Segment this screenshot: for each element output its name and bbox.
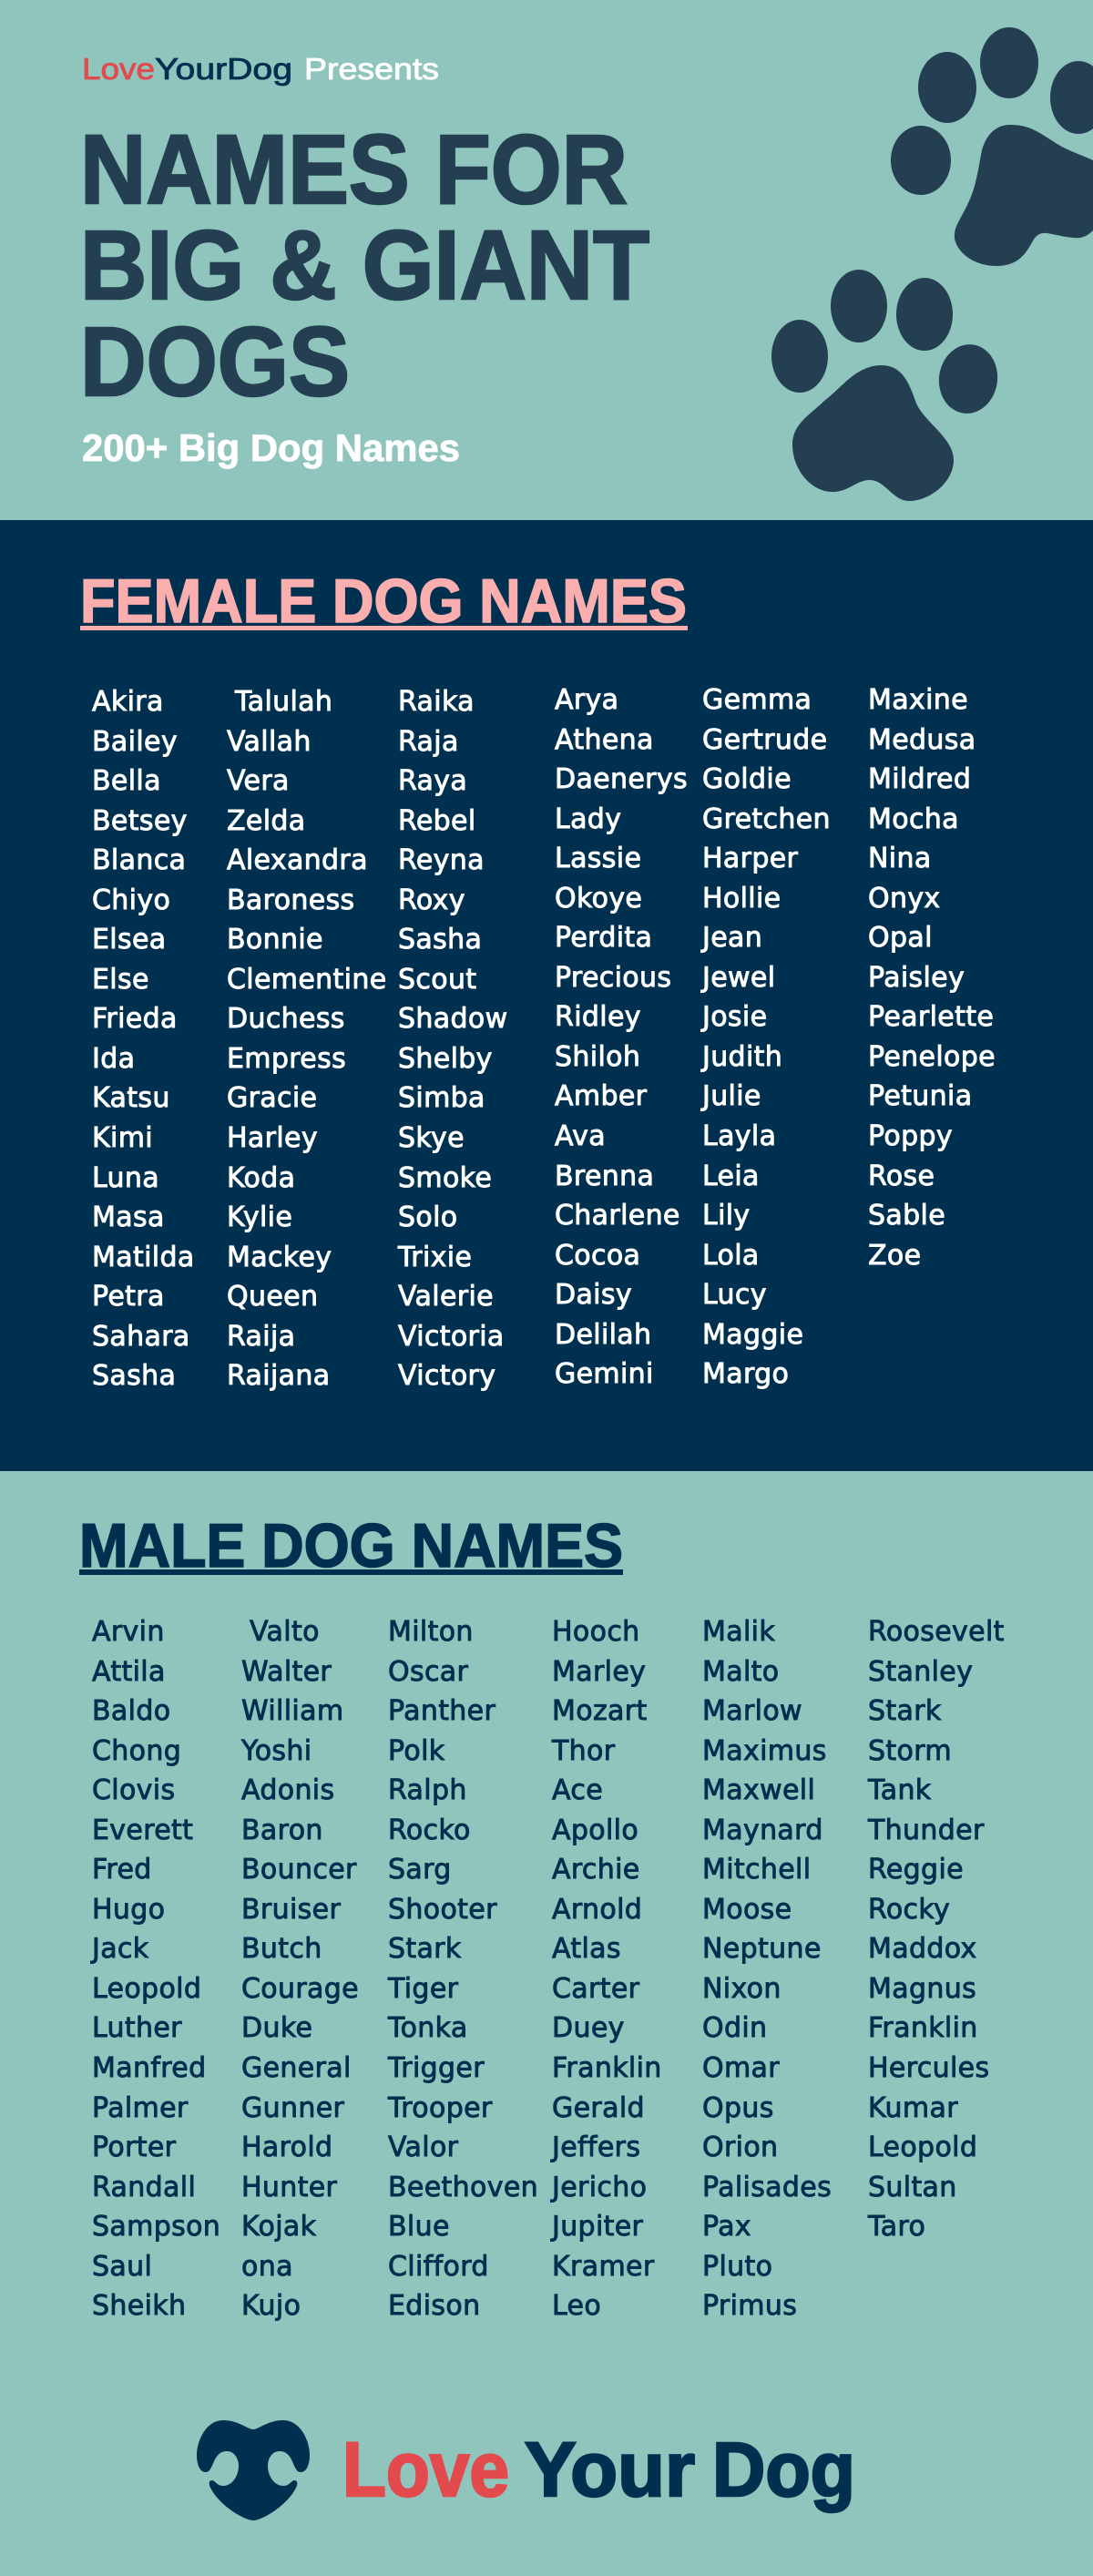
- names column 6: Mildred: [868, 763, 971, 795]
- names column 3: Tiger: [388, 1973, 458, 2005]
- names column 4: Perdita: [555, 922, 652, 954]
- names column 2: Kujo: [241, 2290, 301, 2322]
- names column 5: Neptune: [702, 1933, 822, 1965]
- names column 1: Matilda: [92, 1242, 195, 1273]
- names column 4: Athena: [555, 724, 654, 756]
- names column 5: Mitchell: [702, 1854, 811, 1886]
- names column 6: Penelope: [868, 1041, 996, 1073]
- logo wordmark: Dog: [712, 2427, 855, 2512]
- names column 2: Hunter: [241, 2172, 337, 2203]
- names column 4: Jericho: [552, 2172, 647, 2203]
- names column 5: Pax: [702, 2211, 751, 2243]
- names column 2: ona: [241, 2251, 293, 2283]
- presenter line: Presents: [304, 52, 439, 86]
- names column 2: Queen: [227, 1281, 318, 1313]
- names column 5: Margo: [702, 1358, 789, 1390]
- names column 2: Kojak: [241, 2211, 316, 2243]
- names column 2: Vallah: [227, 726, 312, 758]
- names column 4: Charlene: [555, 1200, 680, 1232]
- names column 3: Trixie: [398, 1242, 472, 1273]
- names column 2: Butch: [241, 1933, 322, 1965]
- footer logo: [197, 2420, 855, 2520]
- names column 4: Delilah: [555, 1319, 651, 1351]
- names column 6: Poppy: [868, 1120, 953, 1152]
- names column 3: Oscar: [388, 1656, 468, 1688]
- names column 4: Okoye: [555, 883, 642, 915]
- names column 3: Skye: [398, 1122, 465, 1154]
- names column 5: Hollie: [702, 883, 781, 915]
- names column 4: Marley: [552, 1656, 646, 1688]
- names column 4: Atlas: [552, 1933, 621, 1965]
- names column 5: Moose: [702, 1894, 792, 1926]
- names column 3: Ralph: [388, 1774, 467, 1806]
- names column 4: [554, 684, 688, 1390]
- names column 2: Yoshi: [241, 1735, 312, 1767]
- names column 4: Kramer: [552, 2251, 655, 2283]
- names column 2: Mackey: [227, 1242, 332, 1273]
- names column 2: Alexandra: [227, 844, 368, 876]
- names column 6: Leopold: [868, 2131, 977, 2163]
- names column 2: Gunner: [241, 2092, 344, 2124]
- panel: male dog names: [0, 1471, 1093, 2576]
- names column 2: Koda: [227, 1162, 295, 1194]
- names column 2: Baroness: [227, 884, 355, 916]
- names column 6: Reggie: [868, 1854, 964, 1886]
- names column 2: Empress: [227, 1043, 346, 1075]
- names column 1: Luna: [92, 1162, 159, 1194]
- names column 5: Josie: [702, 1001, 767, 1033]
- names column 5: Nixon: [702, 1973, 781, 2005]
- subtitle: 200+ Big Dog Names: [82, 426, 460, 469]
- names column 5: Marlow: [702, 1695, 802, 1727]
- names column 5: Gertrude: [702, 724, 827, 756]
- icon: heart dog logo: [197, 2420, 310, 2520]
- names column 2: Raija: [227, 1321, 295, 1353]
- names column 6: Thunder: [868, 1814, 985, 1846]
- names column 5: Palisades: [702, 2172, 832, 2203]
- names column 5: Odin: [702, 2012, 767, 2044]
- names column 3: Scout: [398, 964, 476, 996]
- names column 6: Sable: [868, 1200, 945, 1232]
- names column 5: Layla: [702, 1120, 776, 1152]
- names column 3: Tonka: [388, 2012, 468, 2044]
- names column 3: Raya: [398, 765, 467, 797]
- names column 1: Blanca: [92, 844, 186, 876]
- names column 4: Precious: [555, 962, 671, 994]
- names column 5: Judith: [702, 1041, 782, 1073]
- names column 4: Leo: [552, 2290, 601, 2322]
- names column 6: Magnus: [868, 1973, 976, 2005]
- names column 1: Fred: [92, 1854, 152, 1886]
- names column 2: Harold: [241, 2131, 332, 2163]
- names column 1: Luther: [92, 2012, 182, 2044]
- names column 6: Kumar: [868, 2092, 958, 2124]
- names column 2: Bonnie: [227, 924, 323, 956]
- names column 5: Lola: [702, 1240, 760, 1272]
- names column 4: Ava: [555, 1120, 606, 1152]
- names column 1: Sasha: [92, 1360, 176, 1392]
- presenter line: Love: [82, 52, 155, 86]
- names column 2: Raijana: [227, 1360, 330, 1392]
- names column 2: Kylie: [227, 1201, 292, 1233]
- names column 3: Polk: [388, 1735, 444, 1767]
- names column 6: Opal: [868, 922, 933, 954]
- names column 3: Beethoven: [388, 2172, 538, 2203]
- names column 4: Amber: [555, 1080, 647, 1112]
- names column 1: Chong: [92, 1735, 181, 1767]
- names column 1: Bella: [92, 765, 161, 797]
- names column 3: Roxy: [398, 884, 465, 916]
- names column 1: Frieda: [92, 1003, 178, 1035]
- names column 4: Lassie: [555, 843, 641, 874]
- names column 4: Duey: [552, 2012, 625, 2044]
- names column 3: [397, 686, 507, 1392]
- names column 4: Ridley: [555, 1001, 641, 1033]
- names column 2: Clementine: [227, 964, 387, 996]
- names column 4: Archie: [552, 1854, 640, 1886]
- names column 6: [868, 684, 996, 1272]
- names column 5: Goldie: [702, 763, 792, 795]
- names column 2: Courage: [241, 1973, 359, 2005]
- heading: male dog names: MALE DOG NAMES: [79, 1511, 623, 1580]
- names column 3: Simba: [398, 1082, 485, 1114]
- names column 3: Rebel: [398, 805, 476, 837]
- names column 6: Stark: [868, 1695, 942, 1727]
- names column 2: General: [241, 2052, 352, 2084]
- names column 1: Sahara: [92, 1321, 190, 1353]
- names column 2: Bruiser: [241, 1894, 341, 1926]
- names column 2: Gracie: [227, 1082, 317, 1114]
- names column 6: Maddox: [868, 1933, 977, 1965]
- names column 6: Medusa: [868, 724, 976, 756]
- title: NAMES FOR: [80, 114, 628, 224]
- names column 6: Mocha: [868, 803, 959, 835]
- logo wordmark: [342, 2427, 855, 2512]
- names column 5: Lily: [702, 1200, 751, 1232]
- names column 1: Attila: [92, 1656, 166, 1688]
- names column 5: Gemma: [702, 684, 812, 716]
- names column 6: Sultan: [868, 2172, 957, 2203]
- names column 4: Apollo: [552, 1814, 638, 1846]
- names column 4: Arnold: [552, 1894, 642, 1926]
- names column 3: Valerie: [398, 1281, 494, 1313]
- names column 6: Pearlette: [868, 1001, 994, 1033]
- names column 3: Shelby: [398, 1043, 493, 1075]
- names column 2: Baron: [241, 1814, 323, 1846]
- names column 2: Duke: [241, 2012, 312, 2044]
- names column 2: William: [241, 1695, 343, 1727]
- title: BIG & GIANT: [80, 210, 649, 320]
- names column 6: Paisley: [868, 962, 965, 994]
- names column 1: Ida: [92, 1043, 135, 1075]
- heading: female dog names: FEMALE DOG NAMES: [80, 567, 687, 636]
- names column 1: Porter: [92, 2131, 176, 2163]
- names column 6: Tank: [868, 1774, 932, 1806]
- names column 1: [90, 1616, 220, 2322]
- names column 5: Maximus: [702, 1735, 827, 1767]
- names column 5: [700, 684, 831, 1390]
- presenter line: [82, 52, 439, 86]
- names column 6: Stanley: [868, 1656, 973, 1688]
- names column 1: Everett: [92, 1814, 193, 1846]
- names column 2: Zelda: [227, 805, 306, 837]
- names column 3: Victoria: [398, 1321, 505, 1353]
- names column 4: Daenerys: [555, 763, 688, 795]
- names column 1: Baldo: [92, 1695, 170, 1727]
- names column 5: Opus: [702, 2092, 774, 2124]
- names column 4: Cocoa: [555, 1240, 640, 1272]
- names column 4: Gerald: [552, 2092, 645, 2124]
- names column 2: Vera: [227, 765, 290, 797]
- names column 3: Blue: [388, 2211, 450, 2243]
- names column 4: Gemini: [555, 1358, 654, 1390]
- names column 1: Saul: [92, 2251, 152, 2283]
- names column 4: Daisy: [555, 1279, 632, 1311]
- presenter line: YourDog: [155, 52, 292, 86]
- names column 3: Smoke: [398, 1162, 492, 1194]
- names column 5: Malik: [702, 1616, 775, 1648]
- names column 4: Hooch: [552, 1616, 640, 1648]
- names column 1: Palmer: [92, 2092, 189, 2124]
- names column 5: Pluto: [702, 2251, 772, 2283]
- names column 1: Sheikh: [92, 2290, 186, 2322]
- names column 3: Sarg: [388, 1854, 452, 1886]
- names column 5: Lucy: [702, 1279, 767, 1311]
- names column 1: Hugo: [92, 1894, 165, 1926]
- names column 4: Jeffers: [552, 2131, 640, 2163]
- names column 3: Reyna: [398, 844, 485, 876]
- names column 1: [91, 686, 195, 1392]
- names column 1: Petra: [92, 1281, 165, 1313]
- names column 5: Malto: [702, 1656, 779, 1688]
- names column 1: Arvin: [92, 1616, 165, 1648]
- names column 6: [867, 1616, 1005, 2243]
- names column 3: Shadow: [398, 1003, 507, 1035]
- names column 1: Randall: [92, 2172, 196, 2203]
- names column 6: Rose: [868, 1160, 935, 1192]
- names column 2: Bouncer: [241, 1854, 357, 1886]
- names column 6: Nina: [868, 843, 932, 874]
- names column 6: Taro: [868, 2211, 925, 2243]
- names column 6: Onyx: [868, 883, 941, 915]
- names column 5: Jean: [702, 922, 762, 954]
- names column 2: Talulah: [235, 686, 332, 718]
- names column 3: Panther: [388, 1695, 495, 1727]
- names column 4: Jupiter: [552, 2211, 643, 2243]
- title: [80, 114, 649, 416]
- names column 5: Leia: [702, 1160, 760, 1192]
- names column 6: Storm: [868, 1735, 952, 1767]
- names column 4: Ace: [552, 1774, 603, 1806]
- names column 3: Victory: [398, 1360, 495, 1392]
- names column 4: Brenna: [555, 1160, 654, 1192]
- names column 5: Primus: [702, 2290, 797, 2322]
- names column 1: Bailey: [92, 726, 178, 758]
- names column 5: Jewel: [702, 962, 775, 994]
- names column 3: Edison: [388, 2290, 480, 2322]
- names column 2: Walter: [241, 1656, 332, 1688]
- names column 5: Maggie: [702, 1319, 803, 1351]
- names column 3: Shooter: [388, 1894, 497, 1926]
- names column 5: Maxwell: [702, 1774, 815, 1806]
- names column 2: [226, 686, 387, 1392]
- names column 2: [240, 1616, 359, 2322]
- names column 3: Raja: [398, 726, 459, 758]
- names column 3: Clifford: [388, 2251, 489, 2283]
- names column 1: Chiyo: [92, 884, 170, 916]
- names column 3: [387, 1616, 538, 2322]
- names column 6: Petunia: [868, 1080, 972, 1112]
- names column 1: Betsey: [92, 805, 188, 837]
- names column 2: Adonis: [241, 1774, 334, 1806]
- names column 2: Duchess: [227, 1003, 345, 1035]
- header artwork and title: [80, 27, 1093, 501]
- names column 3: Trigger: [388, 2052, 485, 2084]
- names column 1: Jack: [92, 1933, 149, 1965]
- icon: upper paw print: [891, 27, 1093, 266]
- logo wordmark: Your: [525, 2427, 695, 2512]
- logo wordmark: Love: [342, 2427, 509, 2512]
- names column 2: Valto: [250, 1616, 320, 1648]
- title: DOGS: [80, 306, 350, 416]
- names column 6: Hercules: [868, 2052, 989, 2084]
- names column 3: Valor: [388, 2131, 458, 2163]
- names column 3: Sasha: [398, 924, 482, 956]
- names column 6: Franklin: [868, 2012, 978, 2044]
- names column 5: Orion: [702, 2131, 778, 2163]
- names column 5: Omar: [702, 2052, 780, 2084]
- names column 6: Roosevelt: [868, 1616, 1005, 1648]
- names column 6: Rocky: [868, 1894, 950, 1926]
- names column 2: Harley: [227, 1122, 318, 1154]
- names column 4: Carter: [552, 1973, 639, 2005]
- names column 4: Franklin: [552, 2052, 662, 2084]
- names column 3: Solo: [398, 1201, 457, 1233]
- names column 1: Manfred: [92, 2052, 206, 2084]
- icon: lower paw print: [771, 270, 1002, 501]
- names column 4: [550, 1616, 662, 2322]
- names column 3: Trooper: [388, 2092, 493, 2124]
- names column 4: Lady: [555, 803, 621, 835]
- names column 1: Else: [92, 964, 149, 996]
- names column 5: Gretchen: [702, 803, 831, 835]
- names column 1: Clovis: [92, 1774, 175, 1806]
- names column 1: Elsea: [92, 924, 167, 956]
- names column 1: Kimi: [92, 1122, 153, 1154]
- panel: header background: [0, 0, 1093, 520]
- names column 3: Stark: [388, 1933, 462, 1965]
- names column 5: Harper: [702, 843, 798, 874]
- names column 3: Raika: [398, 686, 475, 718]
- names column 1: Leopold: [92, 1973, 201, 2005]
- names column 4: Thor: [552, 1735, 615, 1767]
- names column 5: Maynard: [702, 1814, 823, 1846]
- names column 6: Maxine: [868, 684, 968, 716]
- names column 1: Sampson: [92, 2211, 220, 2243]
- names column 1: Katsu: [92, 1082, 170, 1114]
- names column 4: Shiloh: [555, 1041, 640, 1073]
- names column 1: Akira: [92, 686, 164, 718]
- names column 5: [702, 1616, 832, 2322]
- names column 3: Rocko: [388, 1814, 471, 1846]
- names column 1: Masa: [92, 1201, 165, 1233]
- names column 3: Milton: [388, 1616, 474, 1648]
- names column 5: Julie: [702, 1080, 761, 1112]
- names column 4: Mozart: [552, 1695, 648, 1727]
- names column 4: Arya: [555, 684, 618, 716]
- panel: female dog names: [0, 520, 1093, 1471]
- names column 6: Zoe: [868, 1240, 921, 1272]
